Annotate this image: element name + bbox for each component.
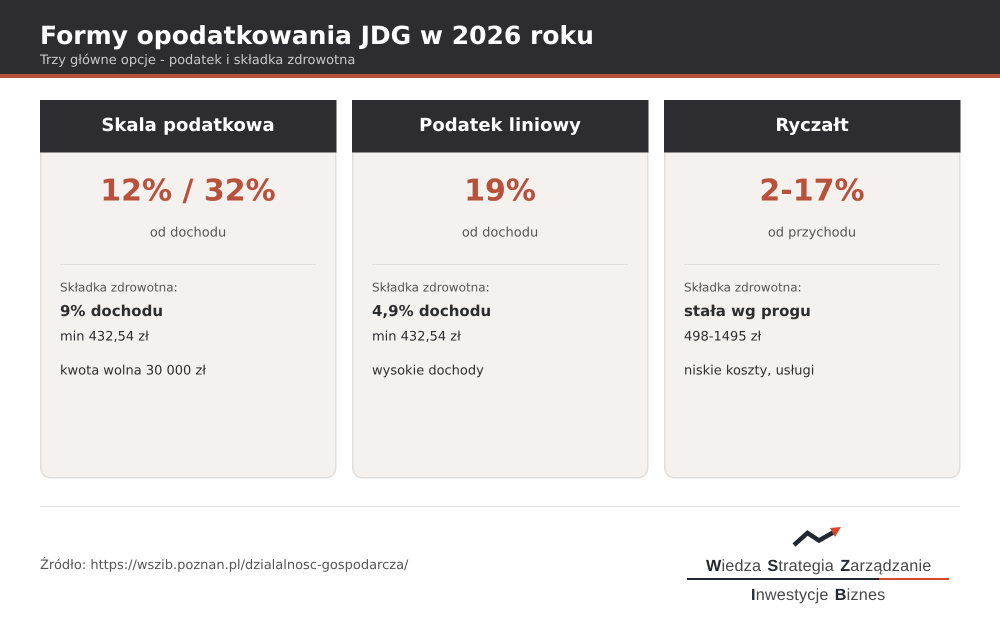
health contribution details: 4,9% dochodu [372, 302, 491, 320]
logo text line 1: Wiedza Strategia Zarządzanie [706, 557, 931, 575]
rate: 19% [464, 174, 536, 208]
rate basis: od dochodu [150, 226, 226, 240]
panel heading: Ryczałt [775, 115, 849, 136]
rate: 2-17% [759, 174, 865, 208]
health contribution details: min 432,54 zł [372, 330, 461, 344]
health contribution details: wysokie dochody [372, 364, 484, 378]
panel heading: Podatek liniowy [419, 115, 581, 136]
health contribution details: min 432,54 zł [60, 330, 149, 344]
rate basis: od przychodu [768, 226, 856, 240]
health contribution details [60, 280, 206, 378]
source note: Źródło: https://wszib.poznan.pl/dzialalnosc-gospodarcza/ [40, 556, 409, 573]
health contribution details [372, 280, 491, 378]
logo [687, 527, 949, 604]
health contribution details: Składka zdrowotna: [684, 280, 802, 294]
title: Formy opodatkowania JDG w 2026 roku [40, 21, 594, 50]
rate: 12% / 32% [100, 174, 276, 208]
health contribution details: 498-1495 zł [684, 330, 762, 344]
health contribution details [684, 280, 814, 378]
health contribution details: Składka zdrowotna: [372, 280, 490, 294]
icon: rising arrow [794, 527, 841, 545]
panel heading: Skala podatkowa [101, 115, 275, 136]
health contribution details: stała wg progu [684, 302, 811, 320]
panel: Podatek liniowy [352, 100, 648, 478]
panel: Ryczałt [664, 100, 960, 478]
panel: Skala podatkowa [40, 100, 336, 478]
health contribution details: kwota wolna 30 000 zł [60, 364, 206, 378]
logo text line 2: Inwestycje Biznes [751, 586, 885, 604]
health contribution details: 9% dochodu [60, 302, 163, 320]
rate basis: od dochodu [462, 226, 538, 240]
health contribution details: Składka zdrowotna: [60, 280, 178, 294]
health contribution details: niskie koszty, usługi [684, 364, 814, 378]
subtitle: Trzy główne opcje - podatek i składka zdrowotna [39, 53, 355, 68]
header band [0, 0, 1000, 78]
